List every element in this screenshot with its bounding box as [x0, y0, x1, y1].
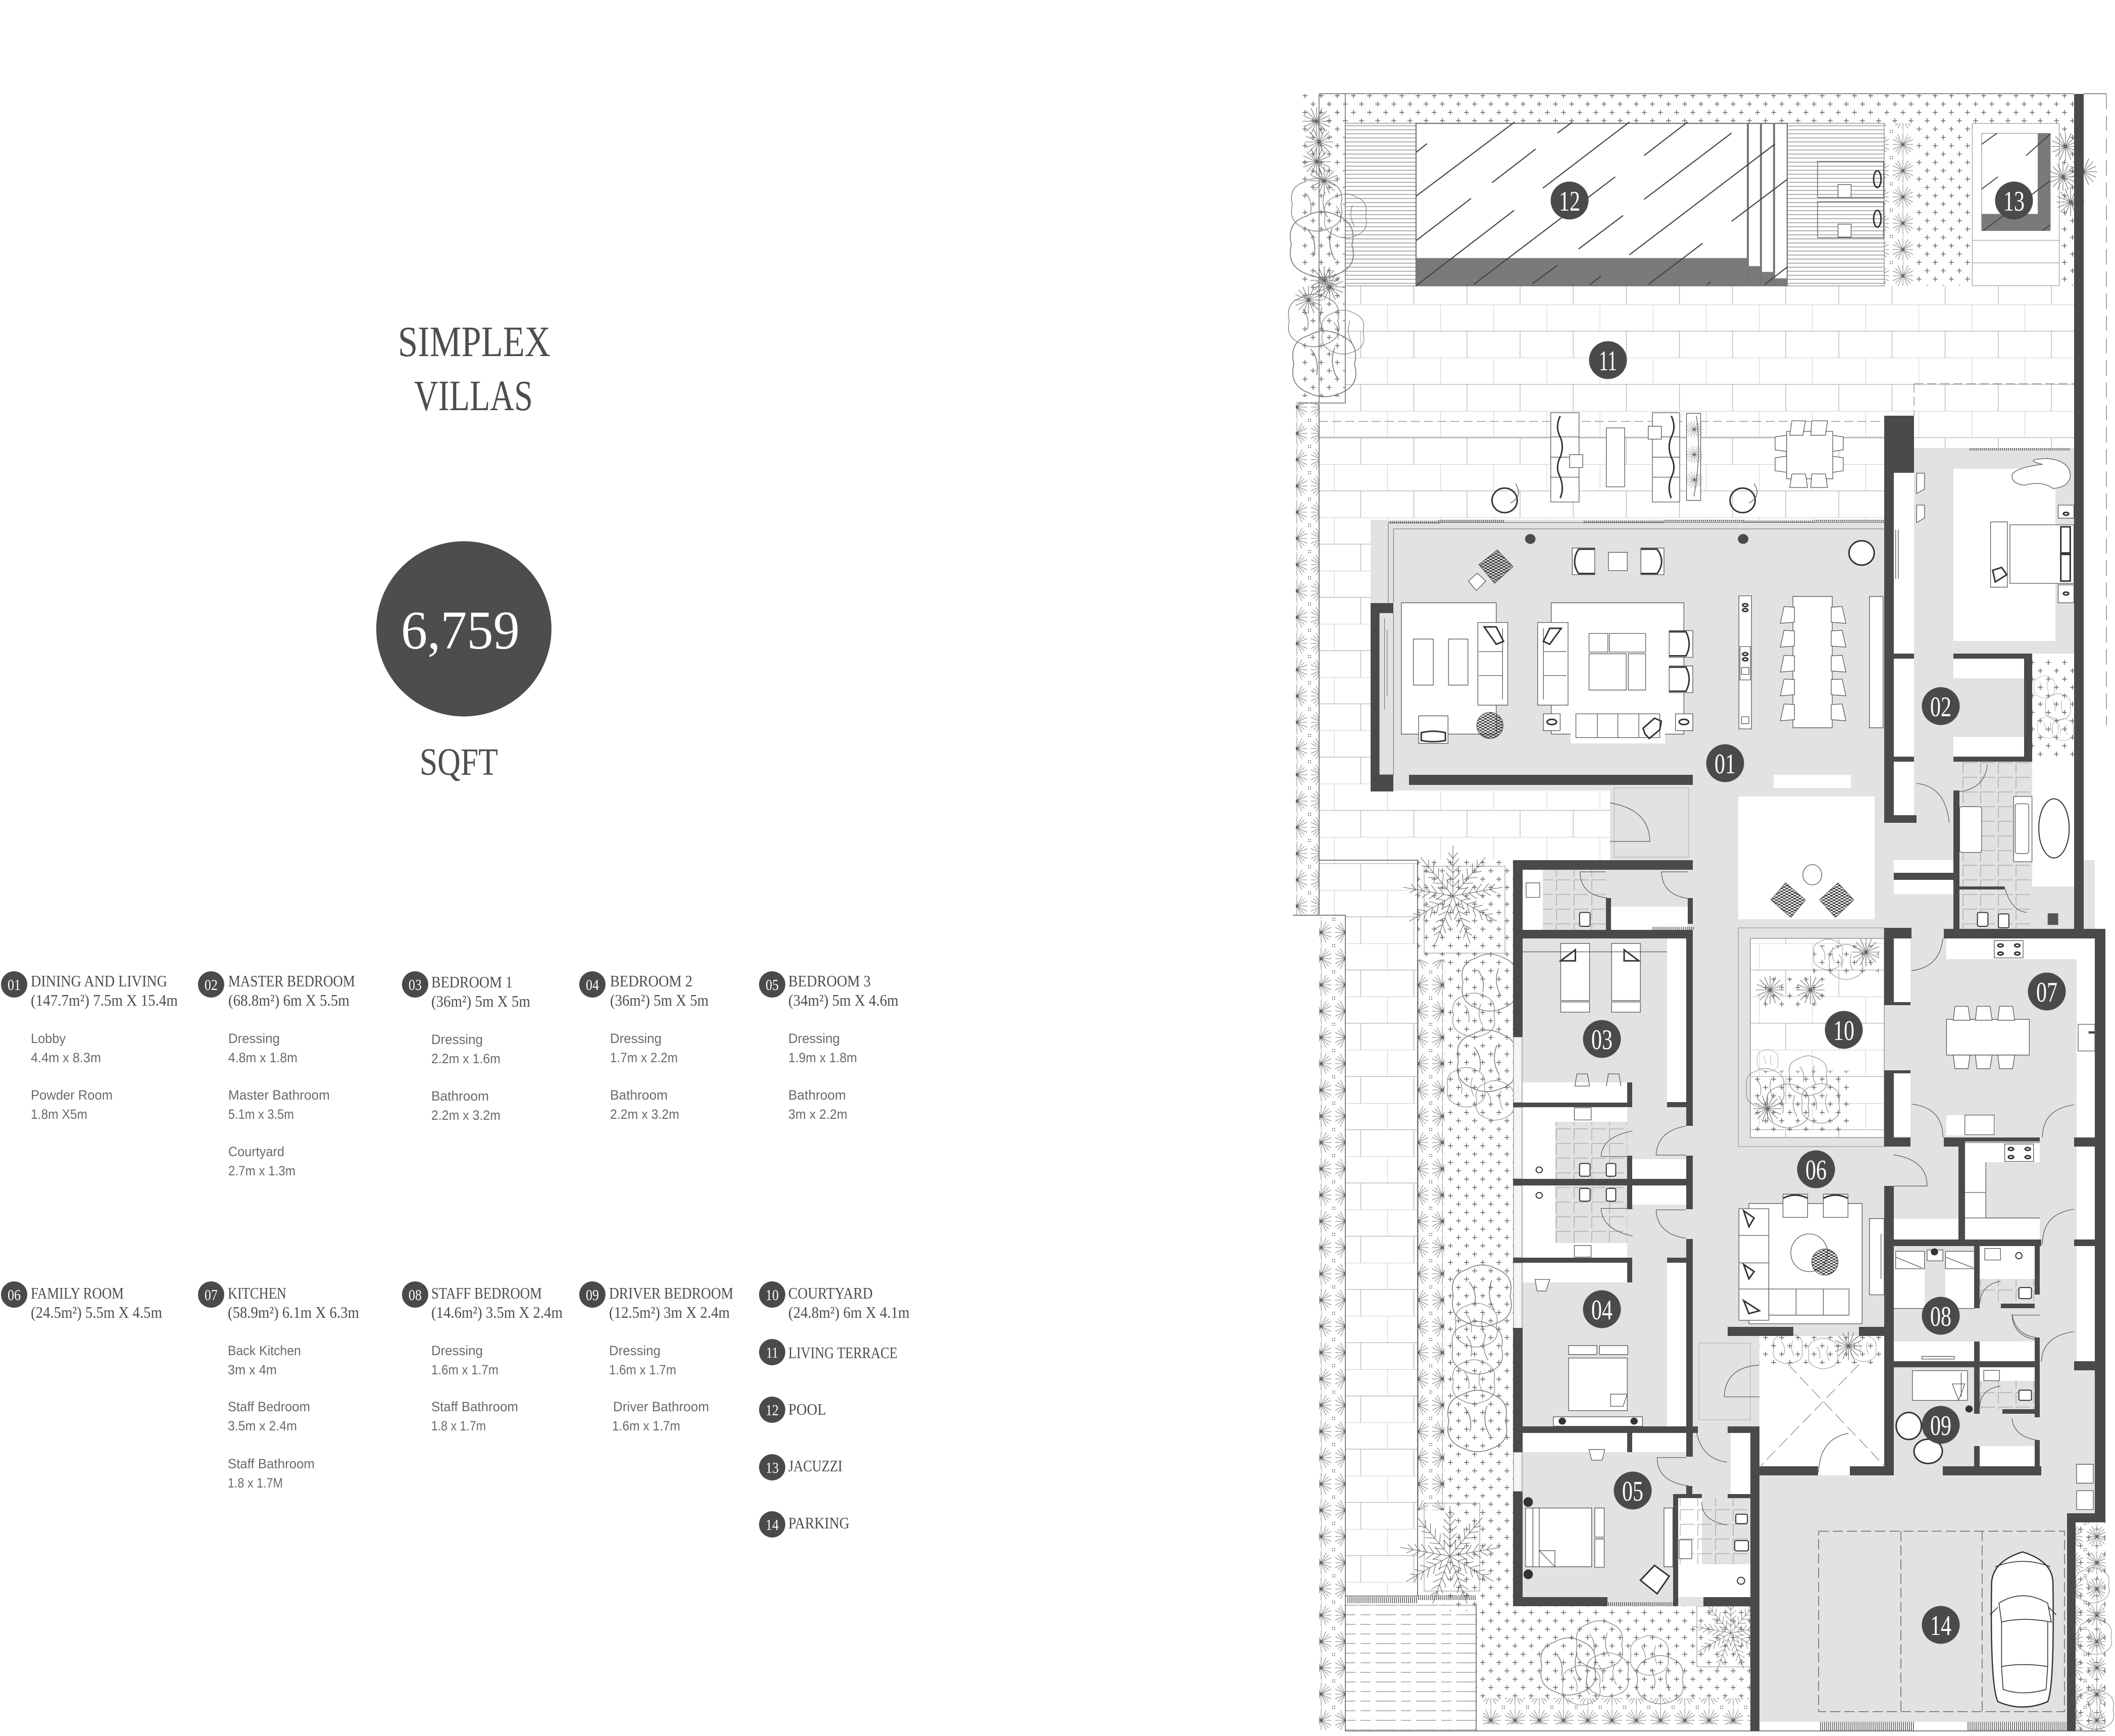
bedroom 2, bedroom 3 and driver room furniture [1524, 1346, 2093, 1594]
interior floors [1371, 448, 2095, 1722]
legend 09 driver bedroom: Driver Bathroom [613, 1399, 709, 1414]
icon: car [1990, 1552, 2056, 1707]
walls [1371, 94, 2105, 1731]
legend 08 staff bedroom [402, 1281, 563, 1433]
legend 11 living terrace: 11 [766, 1344, 778, 1361]
legend 01 dining and living [1, 971, 178, 1122]
legend 02 master bedroom: (68.8m²) 6m X 5.5m [228, 991, 349, 1009]
legend 12 pool [759, 1397, 826, 1423]
legend 11 living terrace [759, 1339, 897, 1365]
palm planters [1424, 866, 1750, 1667]
legend 02 master bedroom: Dressing [228, 1031, 280, 1046]
sun loungers [1818, 162, 1884, 238]
legend 08 staff bedroom: Dressing [431, 1343, 483, 1358]
legend 07 kitchen: (58.9m²) 6.1m X 6.3m [228, 1303, 359, 1321]
parking bays [1819, 1531, 2064, 1712]
legend 09 driver bedroom: 1.6m x 1.7m [612, 1418, 680, 1433]
legend 10 courtyard: 10 [766, 1286, 779, 1304]
plant box foliage [1686, 421, 1703, 488]
bathtub sculptural [2012, 459, 2070, 488]
badge 11 terrace: 11 [1599, 345, 1617, 377]
legend 05 bedroom 3: 3m x 2.2m [788, 1107, 847, 1122]
legend 02 master bedroom: MASTER BEDROOM [228, 972, 355, 990]
badge 08 staff: 08 [1930, 1301, 1951, 1332]
legend 12 pool: POOL [788, 1400, 826, 1418]
legend 06 family room [1, 1281, 162, 1321]
legend 07 kitchen: 07 [205, 1286, 218, 1304]
legend 06 family room: 06 [8, 1286, 21, 1304]
badge 10 courtyard [1825, 1011, 1862, 1049]
badge 01 living: 01 [1715, 749, 1736, 780]
kitchen furniture [1894, 940, 2095, 1308]
wood deck [1345, 1605, 1476, 1730]
entrance porch dashed cross [1761, 1364, 1884, 1466]
legend 03 bedroom 1: 2.2m x 3.2m [431, 1108, 500, 1123]
area badge [376, 541, 551, 716]
area unit: SQFT [420, 741, 498, 783]
powder and master bath fixtures [1526, 883, 2009, 928]
legend 08 staff bedroom: 08 [409, 1286, 422, 1304]
pool drawing [1416, 122, 1787, 286]
legend 04 bedroom 2: 04 [586, 976, 599, 994]
window frames [1379, 522, 1884, 775]
title [398, 317, 550, 420]
bedroom 1 furniture [1523, 944, 1667, 1291]
legend 01 dining and living: (147.7m²) 7.5m X 15.4m [31, 991, 178, 1009]
badge 04 bedroom 2: 04 [1591, 1295, 1613, 1326]
legend 05 bedroom 3: Dressing [788, 1031, 840, 1046]
legend 05 bedroom 3 [759, 971, 898, 1122]
legend 05 bedroom 3: (34m²) 5m X 4.6m [788, 991, 898, 1009]
badge 09 driver: 09 [1930, 1410, 1951, 1442]
legend 05 bedroom 3: 1.9m x 1.8m [788, 1050, 857, 1065]
legend 03 bedroom 1: Dressing [431, 1032, 483, 1047]
legend 07 kitchen: 1.8 x 1.7M [228, 1475, 283, 1491]
door swings [1580, 765, 2074, 1525]
legend 09 driver bedroom [579, 1281, 733, 1433]
legend 07 kitchen: 3m x 4m [228, 1362, 277, 1377]
badge 12 pool [1550, 182, 1589, 219]
legend 04 bedroom 2: BEDROOM 2 [610, 972, 692, 990]
courtyard 10 [1738, 928, 1884, 1147]
legend 05 bedroom 3: 05 [766, 976, 779, 994]
legend 07 kitchen: Back Kitchen [228, 1343, 301, 1358]
title: SIMPLEX [398, 317, 550, 366]
legend 06 family room: (24.5m²) 5.5m X 4.5m [31, 1303, 162, 1321]
legend 03 bedroom 1: (36m²) 5m X 5m [431, 992, 530, 1010]
legend 03 bedroom 1: BEDROOM 1 [431, 973, 513, 991]
badge 10 courtyard: 10 [1833, 1015, 1854, 1047]
entry planter [1759, 1332, 1884, 1369]
badge 11 terrace [1589, 341, 1627, 379]
area badge: 6,759 [401, 601, 520, 661]
entry mats [1614, 788, 1750, 1420]
badge 03 bedroom 1: 03 [1591, 1024, 1613, 1056]
legend 02 master bedroom: 5.1m x 3.5m [228, 1107, 294, 1122]
legend 08 staff bedroom: (14.6m²) 3.5m X 2.4m [431, 1303, 563, 1321]
legend 04 bedroom 2: Dressing [610, 1031, 662, 1046]
legend 05 bedroom 3: Bathroom [788, 1087, 846, 1103]
legend 02 master bedroom: 2.7m x 1.3m [228, 1163, 295, 1178]
legend 10 courtyard [759, 1281, 910, 1321]
legend 10 courtyard: (24.8m²) 6m X 4.1m [788, 1303, 910, 1321]
badge 02 master: 02 [1930, 691, 1951, 723]
badge 06 family [1797, 1151, 1835, 1188]
pool deck left [1345, 123, 1416, 286]
small courtyard planting [2032, 659, 2074, 757]
legend 03 bedroom 1: 03 [409, 976, 422, 994]
badge 14 parking: 14 [1930, 1610, 1951, 1642]
legend 14 parking: 14 [766, 1516, 779, 1533]
badge 09 driver [1922, 1406, 1959, 1444]
legend 01 dining and living: 01 [8, 976, 21, 994]
badge 01 living [1706, 745, 1744, 782]
legend 07 kitchen: Staff Bedroom [228, 1399, 310, 1414]
legend 01 dining and living: 4.4m x 8.3m [31, 1050, 101, 1065]
badge 06 family: 06 [1805, 1155, 1827, 1186]
bedroom windows [1514, 1037, 1522, 1492]
legend 09 driver bedroom: DRIVER BEDROOM [609, 1284, 733, 1302]
living and dining furniture [1401, 534, 1883, 743]
legend 05 bedroom 3: BEDROOM 3 [788, 972, 871, 990]
floor plan [1288, 94, 2114, 1731]
legend 04 bedroom 2: Bathroom [610, 1087, 668, 1103]
legend 01 dining and living: Lobby [31, 1031, 66, 1046]
room number badges [1550, 182, 2066, 1644]
pool deck right [1787, 123, 1884, 286]
legend 09 driver bedroom: Dressing [609, 1343, 661, 1358]
legend 02 master bedroom: Courtyard [228, 1144, 284, 1159]
legend 08 staff bedroom: 1.6m x 1.7m [431, 1362, 498, 1377]
badge 05 bedroom 3: 05 [1622, 1476, 1643, 1507]
legend 03 bedroom 1 [402, 971, 530, 1123]
legend 08 staff bedroom: STAFF BEDROOM [431, 1284, 542, 1302]
jacuzzi drawing [1972, 123, 2059, 286]
site boundary lines [1298, 94, 2106, 725]
badge 14 parking [1922, 1606, 1959, 1644]
legend 08 staff bedroom: Staff Bathroom [431, 1399, 518, 1414]
legend 02 master bedroom: 4.8m x 1.8m [228, 1050, 297, 1065]
legend 02 master bedroom: Master Bathroom [228, 1087, 330, 1103]
legend: room schedule [1, 971, 910, 1537]
legend 06 family room: FAMILY ROOM [31, 1284, 124, 1302]
legend 02 master bedroom [198, 971, 355, 1178]
legend 14 parking: PARKING [788, 1514, 849, 1532]
legend 01 dining and living: Powder Room [31, 1087, 113, 1103]
badge 13 jacuzzi: 13 [2003, 186, 2025, 217]
legend 04 bedroom 2: (36m²) 5m X 5m [610, 991, 709, 1009]
bathroom floor tiling [1543, 762, 2035, 1564]
legend 07 kitchen: Staff Bathroom [228, 1456, 315, 1471]
legend 04 bedroom 2: 2.2m x 3.2m [610, 1107, 679, 1122]
legend 04 bedroom 2: 1.7m x 2.2m [610, 1050, 678, 1065]
badge 07 kitchen [2028, 973, 2066, 1010]
legend 07 kitchen: KITCHEN [228, 1284, 286, 1302]
family room furniture [1739, 1194, 1884, 1324]
badge 05 bedroom 3 [1614, 1472, 1651, 1509]
badge 02 master [1922, 687, 1959, 725]
master bedroom furniture [1896, 473, 2074, 925]
badge 13 jacuzzi [1995, 182, 2033, 219]
legend 09 driver bedroom: (12.5m²) 3m X 2.4m [609, 1303, 730, 1321]
legend 03 bedroom 1: Bathroom [431, 1088, 489, 1104]
legend 09 driver bedroom: 1.6m x 1.7m [609, 1362, 676, 1377]
legend 12 pool: 12 [766, 1401, 779, 1419]
terrace tiles [1319, 286, 2074, 1596]
legend 14 parking [759, 1511, 849, 1537]
garden and planting areas [1296, 94, 2105, 1731]
legend 10 courtyard: COURTYARD [788, 1284, 873, 1302]
terrace furniture [1492, 413, 1843, 513]
badge 03 bedroom 1 [1583, 1020, 1621, 1058]
legend 04 bedroom 2 [579, 971, 709, 1122]
badge 08 staff [1922, 1297, 1959, 1334]
palm trees [1399, 846, 1769, 1670]
legend 08 staff bedroom: 1.8 x 1.7m [431, 1418, 486, 1433]
window hatching [1347, 448, 2071, 1731]
legend 13 jacuzzi: 13 [766, 1459, 779, 1476]
legend 01 dining and living: DINING AND LIVING [31, 972, 167, 990]
legend 09 driver bedroom: 09 [586, 1286, 599, 1304]
legend 03 bedroom 1: 2.2m x 1.6m [431, 1051, 500, 1066]
badge 07 kitchen: 07 [2036, 977, 2057, 1008]
badge 12 pool: 12 [1559, 186, 1580, 217]
legend 02 master bedroom: 02 [205, 976, 218, 994]
trees and shrubs [1288, 107, 2114, 1729]
legend 01 dining and living: 1.8m X5m [31, 1107, 87, 1122]
whites: carpets, closets, counters [1523, 469, 2095, 1597]
legend 07 kitchen: 3.5m x 2.4m [228, 1418, 297, 1433]
badge 04 bedroom 2 [1583, 1290, 1621, 1328]
legend 11 living terrace: LIVING TERRACE [788, 1344, 897, 1362]
site boundary lower [1293, 404, 2105, 1731]
lobby carpet furniture [1771, 865, 1854, 917]
title: VILLAS [414, 371, 533, 420]
legend 13 jacuzzi [759, 1454, 842, 1480]
legend 13 jacuzzi: JACUZZI [788, 1457, 842, 1475]
legend 07 kitchen [198, 1281, 359, 1491]
